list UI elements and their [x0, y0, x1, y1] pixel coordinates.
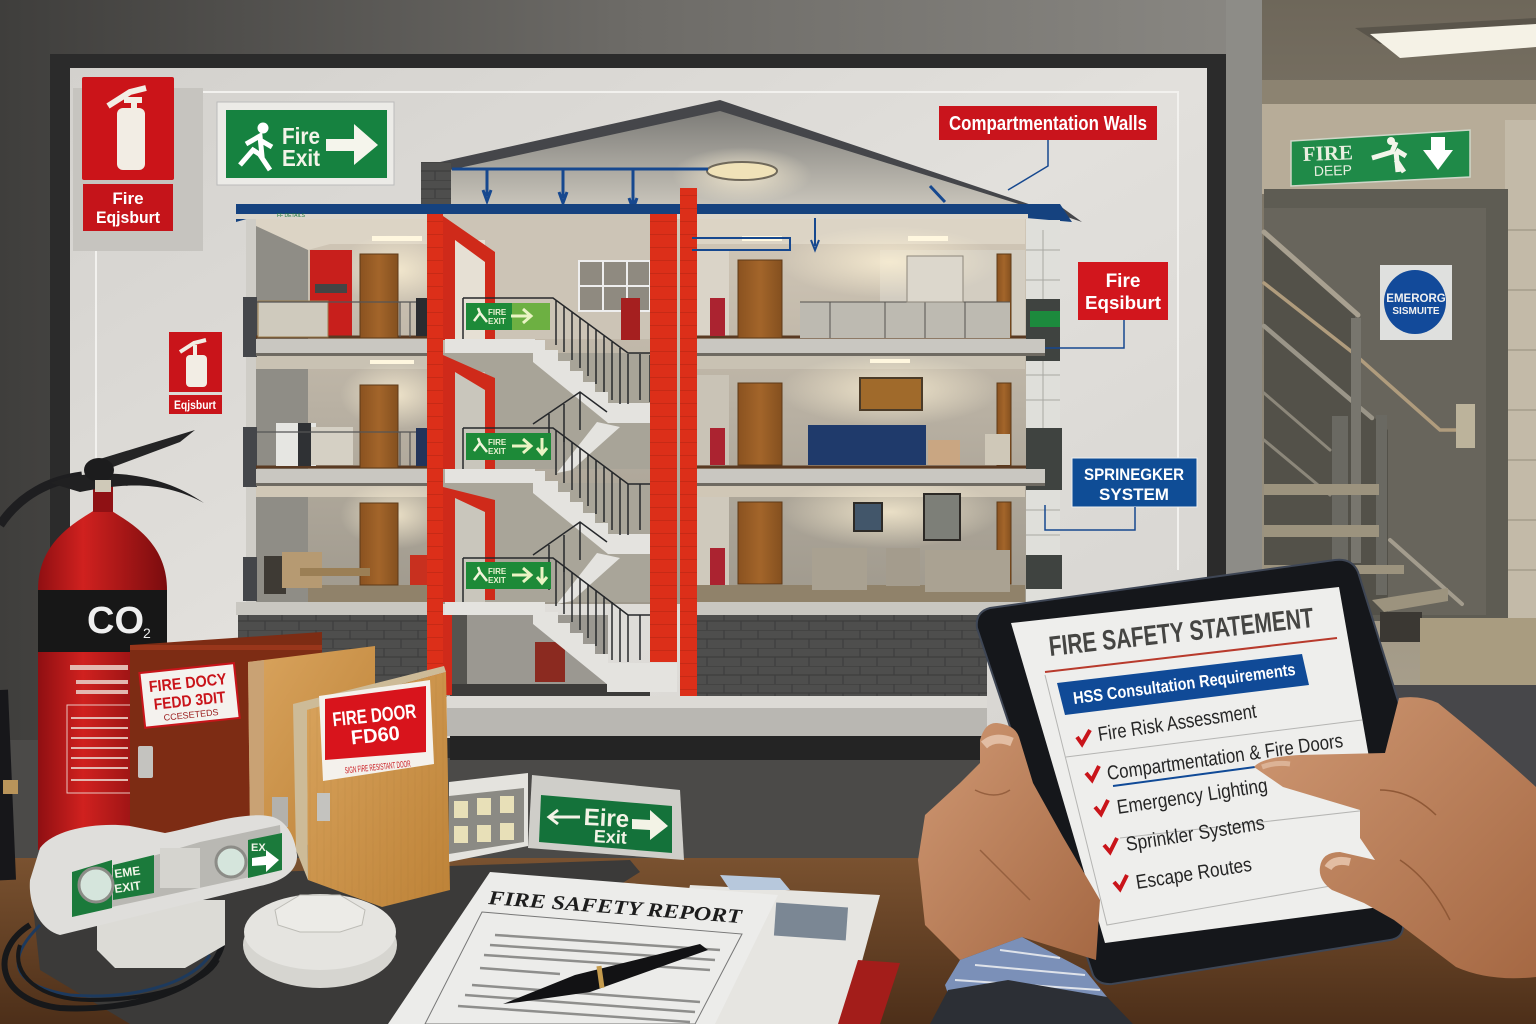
callout: compartmentation walls	[939, 106, 1157, 190]
checklist	[1077, 700, 1344, 894]
callout: fire equipment: Eqsiburt	[1085, 293, 1161, 313]
emergency sign on door: EMERORG	[1386, 293, 1446, 305]
pen	[503, 944, 708, 1004]
stair treads	[1264, 484, 1448, 642]
fire door label	[139, 663, 240, 728]
suit sleeve	[930, 937, 1133, 1024]
checklist: Compartmentation & Fire Doors	[1106, 730, 1344, 785]
smoke detector	[243, 894, 397, 988]
room doors	[360, 254, 1011, 585]
report back pages	[660, 875, 900, 1024]
checklist: Emergency Lighting	[1115, 775, 1269, 819]
display board	[50, 54, 1226, 760]
tablet	[977, 560, 1415, 984]
door handle plate	[1456, 404, 1475, 448]
stair exit signs: FIRE	[488, 308, 507, 317]
fire door label: FEDD 3DIT	[153, 689, 227, 714]
stair exit signs: EXIT	[488, 447, 506, 456]
emergency exit light unit: EME	[113, 863, 141, 881]
fire exit box sign	[528, 775, 684, 860]
small extinguisher sign: Eqjsburt	[174, 398, 216, 412]
ceiling light	[1355, 18, 1536, 58]
fire door fd60 label	[319, 680, 434, 781]
stair flights	[445, 339, 677, 692]
stair exit signs: EXIT	[488, 317, 506, 326]
left hand	[918, 723, 1100, 960]
stair core back wall	[443, 214, 650, 695]
oak door back	[248, 646, 375, 850]
callout: fire equipment: Fire	[1106, 271, 1140, 292]
red compartmentation columns	[427, 188, 697, 696]
extinguisher: CO	[87, 600, 144, 642]
red fire door	[130, 632, 322, 860]
right corridor	[1262, 0, 1536, 865]
furniture right	[710, 256, 1010, 592]
fire door label: FIRE DOCY	[148, 671, 228, 696]
callout: fire equipment	[1045, 262, 1168, 348]
blue roof beam	[236, 204, 1072, 222]
fire safety report	[388, 872, 778, 1024]
sprinkler pipes	[452, 169, 945, 209]
stair exit signs	[466, 303, 551, 589]
fire deep sign: FIRE	[1302, 140, 1353, 166]
stairwell door	[1264, 208, 1486, 615]
fire exit sign: Fire	[282, 123, 320, 149]
callout: sprinkler system: SPRINEGKER	[1084, 465, 1184, 484]
fire exit box sign: Exit	[593, 826, 627, 848]
fire deep sign: DEEP	[1314, 162, 1352, 179]
statement title	[1045, 602, 1337, 672]
right white brick column	[243, 220, 1062, 605]
right hand	[1254, 697, 1536, 978]
red stair frames	[443, 216, 495, 695]
checklist: Escape Routes	[1134, 854, 1253, 894]
checklist: Fire Risk Assessment	[1096, 700, 1258, 746]
callout: sprinkler system	[1045, 458, 1197, 530]
fire door fd60 label: FIRE DOOR	[331, 701, 418, 731]
fire deep sign	[1291, 130, 1470, 186]
oak door front	[293, 666, 450, 907]
fire exit sign: Exit	[282, 145, 320, 171]
blue roof beam: FF DETAILS	[277, 213, 306, 219]
emergency exit light unit: EX	[251, 842, 266, 854]
fire equipment sign top left	[73, 77, 203, 251]
emergency sign on door: SISMUITE	[1392, 306, 1440, 317]
door frame	[1264, 189, 1508, 621]
small extinguisher sign	[169, 332, 222, 414]
fire door fd60 label: SIGN FIRE RESISTANT DOOR	[344, 759, 411, 775]
fire exit box sign: Eire	[583, 804, 630, 833]
stair shadow	[1264, 232, 1388, 615]
furniture left	[257, 298, 427, 594]
building base	[447, 696, 987, 736]
basement brick	[238, 615, 987, 697]
checklist: Sprinkler Systems	[1124, 812, 1266, 856]
table	[0, 858, 1536, 1024]
emergency exit light unit	[30, 815, 297, 968]
emergency exit light unit: EXIT	[113, 878, 142, 896]
building cross-section	[236, 100, 1082, 736]
floor slabs	[236, 337, 1045, 615]
extinguisher: 2	[143, 625, 151, 641]
roof	[421, 100, 1082, 222]
stair railings	[463, 298, 650, 662]
emergency light panel	[449, 773, 528, 862]
floor rooms	[246, 214, 1026, 604]
duct detail	[692, 218, 819, 250]
stair exit signs: FIRE	[488, 567, 507, 576]
callout: sprinkler system: SYSTEM	[1099, 485, 1169, 504]
fire door label: CCESETEDS	[163, 707, 219, 723]
fire equipment sign top left: Fire	[112, 189, 144, 208]
callout: compartmentation walls: Compartmentation Walls	[949, 113, 1147, 135]
emergency sign on door	[1380, 265, 1452, 340]
fire safety report: FIRE SAFETY REPORT	[486, 887, 743, 928]
statement title: FIRE SAFETY STATEMENT	[1047, 602, 1315, 662]
fire door fd60 label: FD60	[350, 723, 401, 750]
cables	[5, 925, 222, 1008]
ceiling lights	[370, 236, 948, 364]
fire equipment sign top left: Eqjsburt	[96, 208, 160, 227]
extinguisher	[0, 430, 204, 880]
consultation banner: HSS Consultation Requirements	[1072, 660, 1297, 708]
stair exit signs: EXIT	[488, 576, 506, 585]
fire exit sign	[217, 102, 394, 185]
stair handrails	[1264, 232, 1470, 604]
stair exit signs: FIRE	[488, 438, 507, 447]
